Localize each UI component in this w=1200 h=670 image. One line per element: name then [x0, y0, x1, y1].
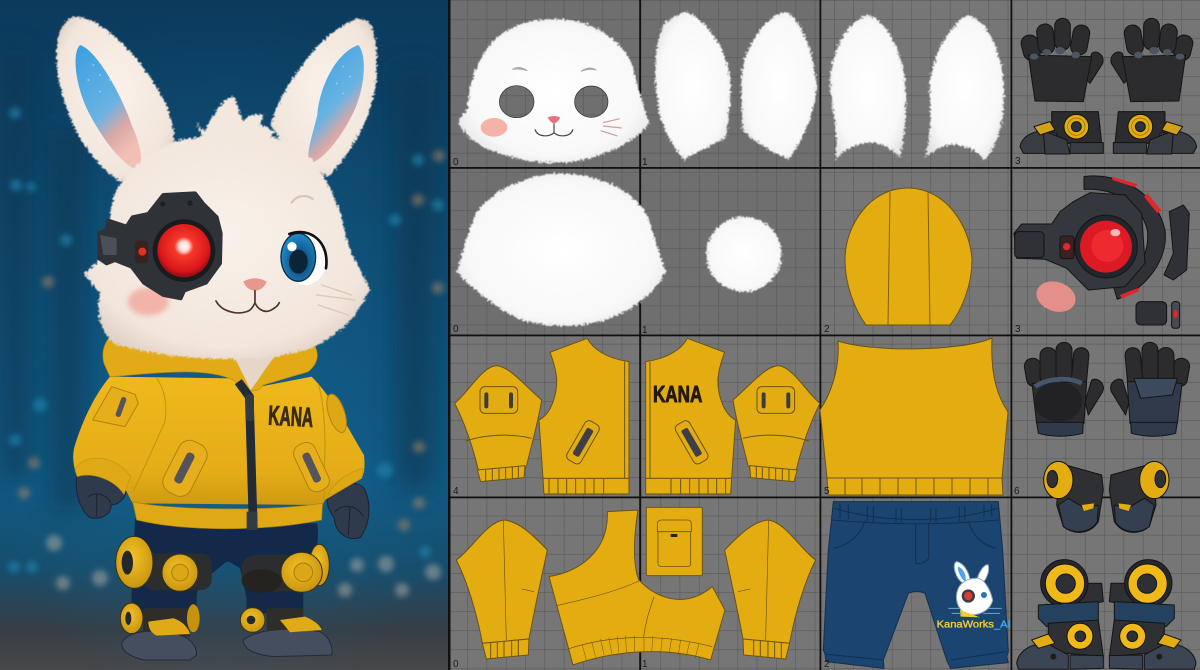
vest piece right with KANA: KANA: [653, 381, 702, 407]
cell index labels: 1: [642, 659, 648, 670]
black glove right: [1111, 18, 1195, 102]
cell index labels: 0: [453, 659, 459, 670]
panel: character render: [0, 0, 448, 670]
panel: texture sheet: [448, 0, 1200, 670]
fur pieces: face mask, ears, body, tail: [457, 12, 816, 326]
leg armor right: [1109, 560, 1196, 669]
red lens: [157, 224, 211, 277]
ear texture 1: [655, 12, 731, 160]
left robotic hand: [76, 471, 126, 518]
cell index labels: 0: [453, 157, 459, 168]
cell index labels: 2: [824, 324, 830, 335]
mouth: [216, 291, 279, 313]
cell index labels: 5: [824, 486, 830, 497]
mask eye hole right: [575, 86, 608, 117]
cell index labels: 1: [642, 157, 648, 168]
cyber eye parts: [1014, 176, 1189, 328]
jacket silhouette: [73, 377, 365, 505]
pocket right: [290, 439, 332, 495]
wrist armor right: [1109, 461, 1169, 532]
vest piece left: [539, 338, 629, 494]
pants: [132, 518, 318, 613]
left ear: [56, 17, 174, 182]
cell index labels: 6: [1014, 486, 1020, 497]
right knee wheels: [242, 544, 329, 593]
head tuft: [197, 97, 275, 150]
logo: KanaWorks rabbit: [948, 562, 1002, 617]
jacket back piece: [820, 338, 1008, 495]
cell index labels: 4: [453, 486, 459, 497]
right robotic hand: [327, 484, 369, 539]
hood piece: [845, 188, 972, 325]
right cuff: [328, 468, 363, 494]
sleeve piece left: [455, 366, 542, 482]
boot piece left: [1020, 112, 1103, 154]
cell index labels: 3: [1015, 156, 1021, 167]
background: night city bokeh: [0, 0, 448, 670]
ear texture 2: [741, 12, 816, 159]
inner ear fur piece left: [830, 15, 906, 160]
jacket back center piece: [549, 510, 725, 665]
wrist armor left: [1044, 461, 1103, 532]
chest label KANA: KANA: [268, 400, 314, 433]
shoulder patch left: [93, 387, 138, 427]
head fur: [83, 134, 370, 359]
whiskers: [317, 285, 355, 315]
right eye: [281, 232, 327, 285]
face mask texture: [458, 19, 649, 163]
jacket pattern pieces: [455, 338, 820, 665]
right boot: [240, 608, 332, 657]
cell index labels: 0: [453, 324, 459, 335]
pocket piece: [646, 507, 702, 576]
blush: [128, 288, 169, 316]
lower sleeve piece left: [456, 520, 547, 659]
nose: [243, 278, 267, 291]
left knee wheels: [116, 536, 212, 591]
figure: head: [56, 17, 377, 359]
lower sleeve piece right: [725, 520, 816, 659]
body fur texture: [457, 173, 666, 326]
shoulder patch right: [323, 392, 350, 435]
zipper: [238, 382, 257, 530]
left cuff: [75, 458, 131, 494]
inner ear fur piece right: [925, 15, 1004, 160]
black glove left: [1019, 18, 1103, 102]
cell index labels: 2: [824, 659, 830, 670]
gloves and boots, lower right cells: [1017, 342, 1196, 669]
logo text: KanaWorks_AI: [937, 620, 1011, 631]
leg armor left: [1017, 560, 1103, 669]
gloves and boots, top right cell: [1014, 18, 1197, 328]
jeans piece with logo: [823, 502, 1011, 668]
hem ribbing: [133, 502, 323, 529]
cyber eye housing: [99, 193, 221, 298]
glove back left: [1023, 342, 1103, 436]
boot piece right: [1113, 112, 1197, 154]
brow: [292, 196, 313, 203]
cell index labels: 3: [1015, 324, 1021, 335]
left boot: [120, 603, 200, 660]
cheek blush swatch: [1032, 277, 1080, 317]
chest fur: [233, 355, 277, 390]
hood: [103, 332, 317, 392]
figure: lower body and jacket: [73, 332, 369, 660]
cell index labels: 1: [642, 325, 648, 336]
sleeve piece right: [733, 366, 820, 482]
sleeve seams: [133, 378, 325, 500]
glove back right: [1111, 342, 1191, 436]
cell index labels: [453, 156, 1021, 670]
sheet background and grid: [448, 0, 1200, 670]
right ear: [271, 18, 377, 177]
mask eye hole left: [499, 86, 534, 118]
tail fur texture: [706, 217, 782, 292]
vest piece right with KANA: [646, 338, 736, 494]
pocket left: [159, 436, 211, 500]
